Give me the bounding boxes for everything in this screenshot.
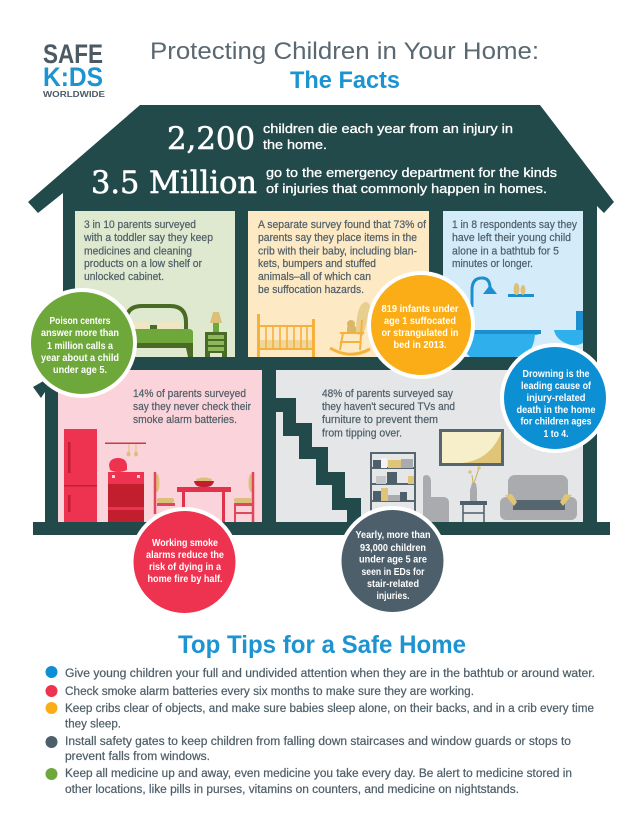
title: The Facts [290,67,400,94]
headline statistic: 2,200: children die each year from an injury in [263,122,513,136]
callout: infant suffocation [367,271,475,379]
callout: poison centers: 1 million calls a [47,341,113,352]
icon: sofa [500,475,577,520]
house structure [28,105,614,535]
callout: poison centers: answer more than [41,328,119,339]
text: nursery statistic: A separate survey found that 73% of [258,219,427,231]
panel: bedroom [75,211,235,357]
text: nursery statistic: parents say they place items in the [258,232,417,244]
logo: Safe Kids Worldwide: SAFE [43,39,103,69]
tip: cribs: Keep cribs clear of objects, and make sure babies sleep alone, on their backs, and in a crib every time [65,703,594,715]
icon: staircase [276,398,361,522]
headline statistic: 2,200: 2,200 [167,121,255,157]
callout: smoke alarms: risk of dying in a [149,562,221,573]
text: bathroom statistic: minutes or longer. [452,258,533,270]
tip: water: Give young children your full and undivided attention when they are in the bathtub or around water. [65,668,595,680]
icon: bookshelf [370,452,416,522]
callout: smoke alarms: home fire by half. [148,574,223,585]
headline statistic: 2,200 [167,121,513,157]
tip: smoke alarms: Check smoke alarm batteries every six months to make sure they are working. [65,686,474,698]
tip: stairs and windows: prevent falls from windows. [65,751,210,763]
callout: stair injuries: under age 5 are [359,554,427,566]
text: nursery statistic: crib with their baby, including blan- [258,246,417,258]
title: Protecting Children in Your Home: [150,38,539,65]
tip: stairs and windows: Install safety gates to keep children from falling down staircases and window guards or stops to [65,736,571,748]
tip: medicine: Keep all medicine up and away, even medicine you take every day. Be alert to medicine stored in [65,768,572,780]
text: living room statistic: furniture to prevent them [322,414,438,426]
callout: smoke alarms [130,507,240,617]
icon: toilet [554,311,583,345]
callout: stair injuries: injuries. [376,591,410,602]
tip: medicine [46,768,572,796]
icon: stove and pot [108,458,144,522]
text: bedroom statistic: with a toddler say they keep [83,232,213,244]
icon: shelf with bottles [508,283,534,297]
callout: stair injuries: stair-related [367,579,419,590]
text: nursery statistic: kets, bumpers and stuffed [258,258,376,270]
callout: drowning: 1 to 4. [544,429,569,440]
text: kitchen statistic [133,388,251,426]
callout: stair injuries [338,506,448,616]
headline statistic: 3.5 Million: 3.5 Million [91,165,257,201]
callout: infant suffocation: or strangulated in [382,328,458,339]
icon: shower and bathtub [440,278,541,357]
callout: drowning: injury-related [526,393,586,404]
title [150,38,539,94]
icon: side table and vase [460,466,487,522]
text: bathroom statistic: 1 in 8 respondents say they [452,219,577,231]
callout: poison centers [27,288,137,398]
panel: living room [276,370,583,522]
icon: rocking chair with teddy bear [330,302,370,354]
callout: drowning [500,343,610,453]
headline statistic: 3.5 Million [91,165,557,201]
icon: utensil rail [105,442,146,456]
panel: nursery [248,211,429,357]
text: kitchen statistic: smoke alarm batteries. [133,414,237,426]
text: bathroom statistic [452,219,577,270]
callout: poison centers: year about a child [41,353,119,364]
callout: drowning: leading cause of [521,381,592,392]
callout: drowning: death in the home [516,405,596,416]
text: kitchen statistic: say they never check their [133,401,251,413]
tip: cribs: they sleep. [65,718,121,730]
icon: crib [257,314,315,357]
tip: stairs and windows [46,736,571,763]
text: nursery statistic [258,219,427,296]
text: bedroom statistic [83,219,213,283]
tip: cribs [46,702,594,730]
text: bedroom statistic: unlocked cabinet. [84,271,164,283]
text: bedroom statistic: 3 in 10 parents surveyed [84,219,196,231]
icon: refrigerator [64,429,97,522]
callout: stair injuries: seen in EDs for [362,567,425,578]
callout: poison centers: Poison centers [50,316,111,327]
icon: dining table and chairs [154,472,254,522]
heading: top tips: Top Tips for a Safe Home [178,631,466,659]
headline statistic: 3.5 Million: go to the emergency department for the kinds [266,166,557,180]
icon: nightstand and lamp [205,312,227,357]
logo: Safe Kids Worldwide [43,39,106,99]
icon: bed [124,304,193,357]
logo: Safe Kids Worldwide: WORLDWIDE [43,90,106,99]
panel: bathroom [440,211,583,357]
panel: kitchen [58,370,262,522]
callout: poison centers: under age 5. [53,365,107,376]
text: bathroom statistic: alone in a bathtub for 5 [452,246,559,258]
text: bedroom statistic: medicines and cleaning [84,246,192,258]
callout: infant suffocation: age 1 suffocated [384,316,456,327]
text: kitchen statistic: 14% of parents surveyed [133,388,246,400]
callout: infant suffocation: bed in 2013. [394,340,447,351]
text: living room statistic: from tipping over. [322,428,402,440]
icon: television [439,429,504,466]
callout: drowning: Drowning is the [522,369,590,380]
callout: drowning: for children ages [520,416,592,428]
callout: stair injuries: Yearly, more than [356,530,430,541]
text: living room statistic: 48% of parents surveyed say [322,388,453,400]
callout: stair injuries: 93,000 children [360,543,426,554]
callout: infant suffocation: 819 infants under [382,304,459,315]
tips list [46,666,595,796]
text: living room statistic [322,388,455,440]
callout: smoke alarms: Working smoke [152,538,218,549]
text: bedroom statistic: products on a low shelf or [84,258,202,270]
icon: armchair [423,475,449,522]
callout: smoke alarms: alarms reduce the [146,550,224,561]
logo: Safe Kids Worldwide: K:DS [43,62,103,92]
text: nursery statistic: animals–all of which can [258,271,371,283]
headline statistic: 3.5 Million: of injuries that commonly happen in homes. [266,182,547,196]
text: nursery statistic: be suffocation hazards. [258,284,364,296]
tip: medicine: other locations, like pills in purses, vitamins on counters, and medicine on nightstands. [65,784,519,796]
headline statistic: 2,200: the home. [263,138,327,152]
text: living room statistic: they haven't secured TVs and [322,401,455,413]
text: bathroom statistic: have left their young child [452,232,571,244]
